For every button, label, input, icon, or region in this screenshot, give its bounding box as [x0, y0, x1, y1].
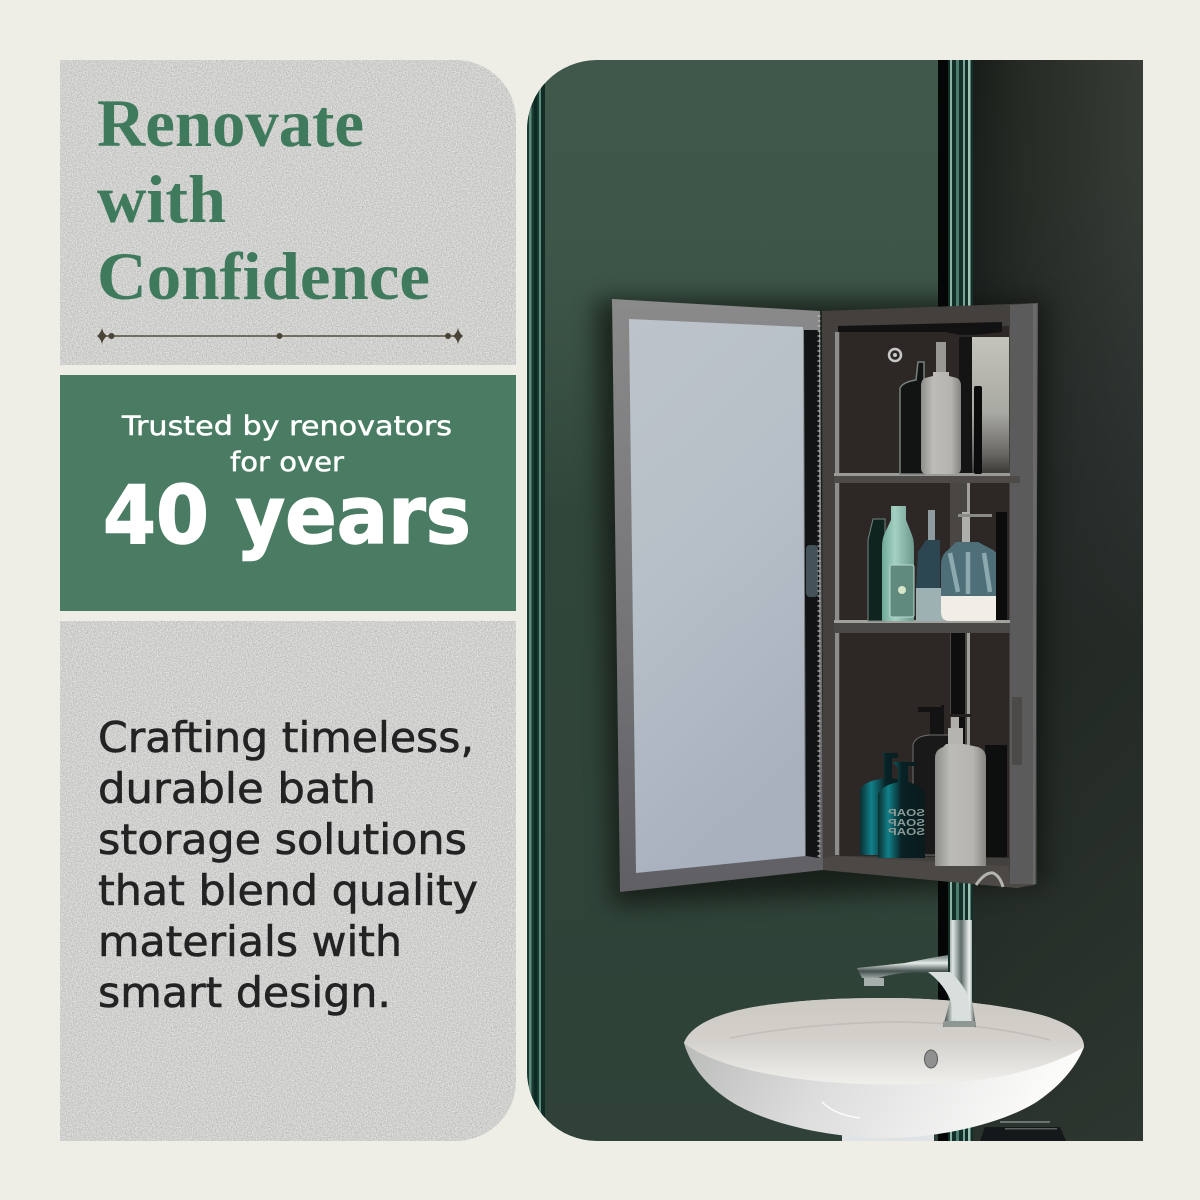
title — [97, 85, 430, 314]
soap labels: SOAP — [888, 827, 925, 838]
sink — [684, 998, 1084, 1142]
sink basin outer — [684, 998, 1084, 1138]
small glass bottle — [916, 510, 944, 621]
shelf 2 — [834, 620, 1010, 633]
tall dark bottle — [912, 705, 948, 856]
overflow hole — [924, 1050, 938, 1068]
description text: storage solutions — [98, 815, 467, 864]
sink basin interior — [684, 998, 1084, 1085]
left glass edge stripes — [527, 60, 545, 1141]
trust text — [121, 411, 452, 478]
cabinet body — [822, 303, 1038, 888]
title: Confidence — [97, 238, 430, 314]
reflected mirror panel — [972, 337, 1009, 474]
middle shelf bottles — [868, 506, 1007, 621]
description text: durable bath — [98, 764, 376, 813]
ornamental divider — [97, 328, 463, 344]
soap labels: SOAP — [888, 808, 925, 819]
trust text: for over — [230, 447, 345, 478]
towel bars — [980, 1121, 1066, 1141]
gray pump bottle — [921, 342, 961, 474]
gray pump bottle — [935, 714, 986, 866]
right dark bottle — [985, 745, 1007, 857]
big number: 40 years: 40 years — [103, 469, 471, 562]
top shelf bottles — [900, 342, 982, 474]
dark bottle — [900, 362, 924, 474]
description text: that blend quality — [98, 866, 478, 915]
mint bottle — [882, 506, 914, 621]
bottom shelf bottles — [860, 705, 1007, 866]
soap labels: SOAP — [888, 818, 925, 829]
description text — [98, 713, 478, 1017]
sink highlights — [822, 1102, 860, 1118]
right wall — [970, 60, 1143, 1141]
glass pump bottle — [941, 512, 1000, 621]
cabinet — [612, 299, 1038, 892]
mounting bracket — [889, 349, 901, 361]
handle notch — [976, 873, 1003, 887]
panel: bathroom scene — [527, 60, 1143, 1142]
description text: Crafting timeless, — [98, 713, 474, 762]
description text: materials with — [98, 917, 402, 966]
title: with — [97, 161, 226, 237]
door hinge — [818, 315, 820, 860]
sink inner rim — [730, 1022, 1050, 1040]
title: Renovate — [97, 85, 364, 161]
faucet — [857, 920, 976, 1027]
reflected corner pillar — [950, 337, 972, 746]
description text: smart design. — [98, 968, 391, 1017]
soap labels — [888, 809, 924, 835]
bottom shelf — [824, 870, 1034, 888]
trust text: Trusted by renovators — [121, 411, 452, 442]
shadow behind cabinet — [596, 300, 1046, 905]
shelf 1 — [834, 473, 1020, 483]
corner glass strip — [938, 60, 973, 1141]
panel: description — [60, 621, 516, 1141]
cabinet door — [612, 299, 823, 892]
dark green bottle — [868, 519, 885, 621]
panel: trust badge — [60, 375, 516, 611]
sink pedestal — [842, 1134, 934, 1141]
left wall — [527, 60, 939, 1141]
teal soap bottles — [860, 753, 925, 858]
panel: headline — [60, 60, 516, 365]
